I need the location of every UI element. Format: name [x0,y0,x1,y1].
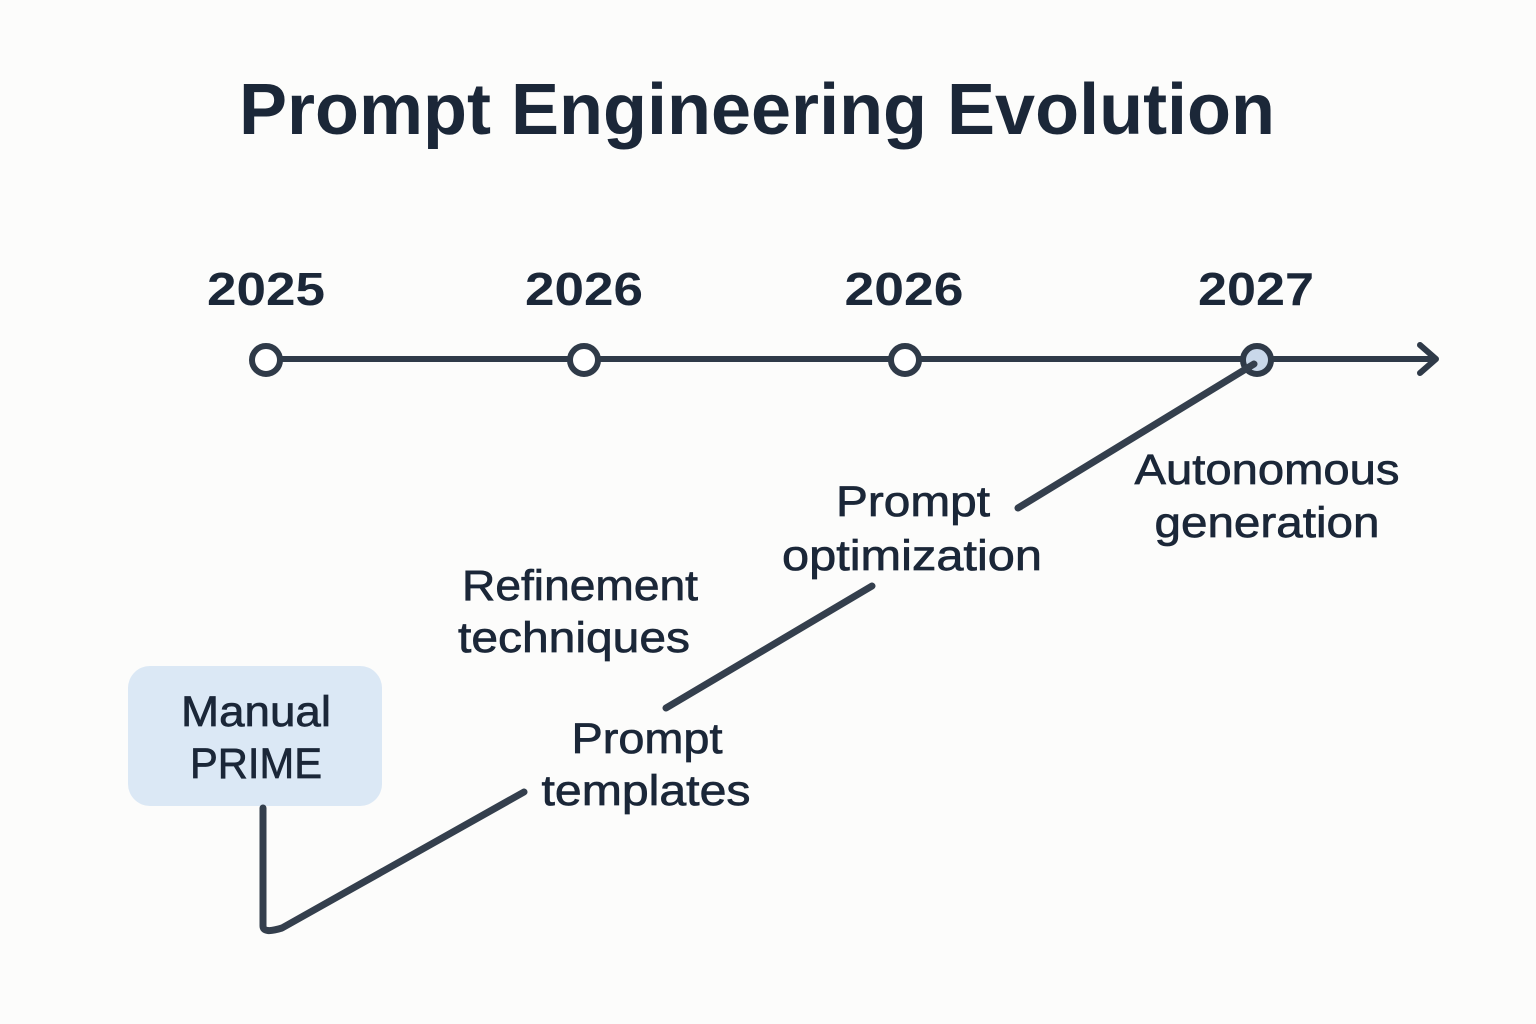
label: Refinement techniques [458,562,698,662]
timeline markers [252,346,1271,374]
box: Manual PRIME: Manual [181,688,331,736]
label: Prompt templates: templates [542,767,750,815]
label: Prompt optimization [782,478,1042,580]
box: Manual PRIME: PRIME [190,740,322,788]
label: Autonomous generation [1134,446,1400,547]
label: Prompt templates [542,715,750,815]
label: Autonomous generation: generation [1154,499,1380,547]
label: Prompt optimization: optimization [782,532,1042,580]
timeline axis arrow [266,345,1436,373]
year labels [207,263,1314,315]
year labels: 2026 [525,263,643,315]
year labels: 2026 [844,263,964,315]
box: Manual PRIME [128,666,382,806]
label: Refinement techniques: Refinement [462,562,698,610]
label: Refinement techniques: techniques [458,614,690,662]
label: Prompt optimization: Prompt [836,478,990,526]
year labels: 2027 [1198,263,1314,315]
connector lines [263,364,1254,931]
year labels: 2025 [207,263,325,315]
label: Prompt templates: Prompt [572,715,723,763]
title: Prompt Engineering Evolution [239,70,1275,150]
label: Autonomous generation: Autonomous [1134,446,1400,494]
